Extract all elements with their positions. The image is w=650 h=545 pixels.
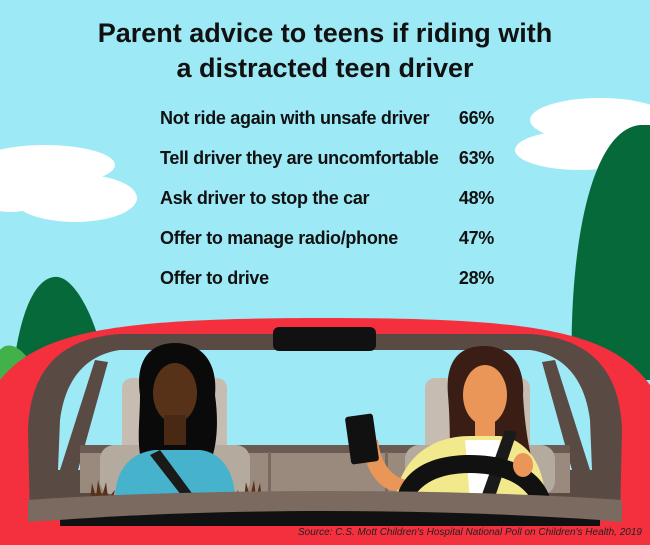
row 5: 28% — [459, 268, 494, 288]
pillars — [60, 360, 108, 470]
row 5: Offer to drive — [160, 268, 269, 288]
row 1: Not ride again with unsafe driver — [160, 108, 429, 128]
title — [98, 18, 552, 83]
row 4: 47% — [459, 228, 494, 248]
cloud left — [0, 145, 137, 222]
mirror — [273, 327, 376, 351]
cloud right — [515, 98, 650, 170]
back seat wall — [80, 448, 570, 493]
car body — [0, 318, 650, 545]
title: a distracted teen driver — [176, 53, 474, 83]
tree left — [0, 277, 105, 400]
row 2: 63% — [459, 148, 494, 168]
seats — [122, 378, 227, 493]
row 3: Ask driver to stop the car — [160, 188, 369, 208]
row 4: Offer to manage radio/phone — [160, 228, 398, 248]
window — [58, 350, 592, 470]
dashboard — [28, 491, 622, 522]
row 3 — [160, 188, 494, 208]
title: Parent advice to teens if riding with — [98, 18, 552, 48]
tree right — [572, 125, 650, 380]
passenger — [90, 343, 262, 502]
frame — [28, 334, 622, 520]
row 2: Tell driver they are uncomfortable — [160, 148, 439, 168]
row 5 — [160, 268, 494, 288]
row 3: 48% — [459, 188, 494, 208]
row 1: 66% — [459, 108, 494, 128]
driver — [345, 346, 552, 505]
source: Source: C.S. Mott Children's Hospital National Poll on Children's Health, 2019 — [298, 527, 642, 538]
